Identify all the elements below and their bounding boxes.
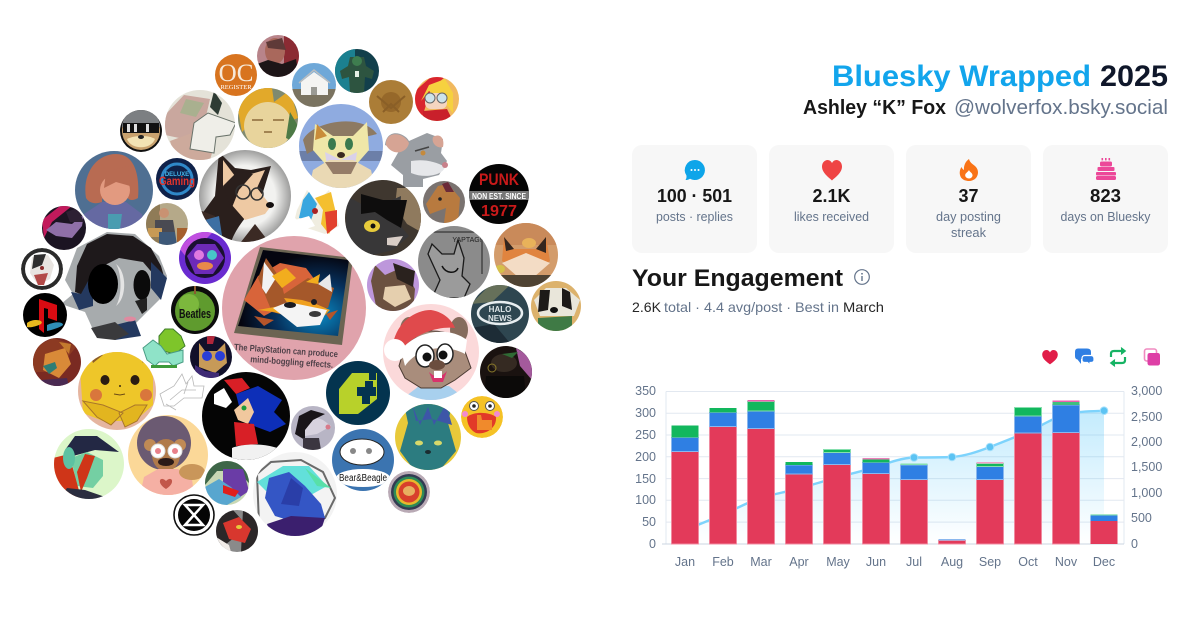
avatar: Santa Sonic	[202, 372, 290, 460]
month labels: Dec	[1093, 555, 1115, 569]
panel: posting streak stat: day posting	[936, 210, 1001, 224]
icon: legend heart	[1042, 350, 1058, 364]
panel: days on Bluesky stat	[1043, 145, 1168, 253]
avatar: cat with blue glasses	[190, 336, 232, 378]
avatar: punk poster: PUNK	[479, 170, 520, 189]
avatar: gray comic sketch: YAPTAG!	[452, 237, 482, 244]
icon: chat bubble	[685, 160, 705, 180]
profile name and handle	[803, 97, 1168, 119]
left axis labels: 0	[649, 537, 656, 551]
left axis labels: 350	[635, 384, 656, 398]
left axis labels: 150	[635, 472, 656, 486]
engagement summary text: total · 4.4 avg/post · Best in	[664, 299, 839, 315]
icon: heart	[822, 160, 842, 180]
icon: birthday cake	[1096, 158, 1116, 180]
right axis labels: 2,000	[1131, 435, 1162, 449]
left axis labels	[635, 384, 656, 551]
avatar: dark armored man	[257, 35, 300, 77]
profile name and handle: Ashley “K” Fox	[803, 97, 946, 119]
avatar: Beatles green apple	[171, 286, 219, 334]
avatar: brown horse	[423, 181, 465, 223]
avatar: dark figure with green glasses	[480, 346, 532, 398]
avatar: lion	[33, 338, 81, 386]
panel: days on Bluesky stat: days on Bluesky	[1060, 210, 1151, 224]
avatar: punk poster	[469, 164, 529, 224]
month labels: Nov	[1055, 555, 1078, 569]
chart grid	[662, 392, 1124, 544]
avatar: punk poster: 1977	[481, 203, 517, 220]
panel: likes received stat: likes received	[794, 210, 869, 224]
left axis labels: 100	[635, 493, 656, 507]
month labels: Feb	[712, 555, 734, 569]
avatar: badger	[531, 281, 581, 331]
avatar: red-haired person	[75, 151, 153, 229]
right axis labels: 1,500	[1131, 460, 1162, 474]
Oct bar	[1014, 408, 1042, 544]
avatar: gray comic sketch	[418, 226, 490, 298]
avatar: PlayStation magazine fox: The PlayStation can produce	[234, 342, 338, 359]
right axis labels: 3,000	[1131, 384, 1162, 398]
month labels: Mar	[750, 555, 772, 569]
panel: days on Bluesky stat: 823	[1090, 186, 1121, 206]
panel: avatar bubble cluster	[21, 35, 581, 552]
avatar: Halo news: NEWS	[488, 314, 513, 323]
avatar: sleeping red fox	[494, 223, 558, 287]
avatar: bear with heart glasses	[128, 415, 208, 495]
Jul bar	[900, 464, 928, 544]
avatar: colorful fox	[295, 190, 339, 234]
avatar: PlayStation logo	[23, 293, 67, 337]
avatar: blonde sleeping face	[238, 88, 298, 150]
avatar: purple neon creature	[179, 232, 231, 284]
avatar: line sketch dragon	[160, 374, 204, 410]
heading: Bluesky Wrapped 2025: Bluesky Wrapped	[832, 60, 1091, 93]
Jan bar	[672, 426, 698, 544]
left axis labels: 50	[642, 515, 656, 529]
month labels: Aug	[941, 555, 963, 569]
Sep bar	[976, 462, 1004, 544]
avatar: OC Register logo	[215, 54, 257, 96]
avatar: green armored soldier	[335, 49, 379, 93]
avatar: Bear and Beagle: Bear&Beagle	[339, 473, 387, 484]
month labels: Sep	[979, 555, 1001, 569]
chart legend icons	[1042, 348, 1160, 366]
Nov bar	[1052, 400, 1080, 544]
Mar bar	[748, 400, 774, 544]
icon: info	[855, 270, 869, 284]
avatar: dark teal logo with plus	[326, 361, 390, 425]
icon: legend quotes	[1144, 349, 1160, 366]
month labels: Apr	[789, 555, 809, 569]
avatar: teal creature on yellow	[395, 404, 461, 470]
avatar: blonde red-hood character	[415, 77, 459, 121]
avatar: gray wolf with black hair	[61, 232, 167, 340]
May bar	[824, 450, 850, 544]
avatar: punk poster: NON EST. SINCE	[472, 192, 527, 201]
avatar: dark wolf with yellow eye	[345, 180, 421, 256]
avatar: Beatles green apple: Beatles	[179, 306, 211, 321]
month labels: Jan	[675, 555, 695, 569]
avatar: Halo news	[471, 285, 529, 343]
left axis labels: 250	[635, 428, 656, 442]
avatar: blue dragon	[253, 452, 337, 536]
avatar: man with guitar	[146, 203, 188, 245]
avatar: blue cat	[205, 461, 249, 505]
right axis labels: 2,500	[1131, 410, 1162, 424]
engagement summary text	[632, 299, 884, 315]
avatar: possum in black ring	[21, 248, 63, 290]
avatar: black-haired mouse	[291, 406, 335, 450]
avatar: rainbow rings	[388, 471, 430, 513]
avatar: brown texture	[369, 80, 413, 124]
avatar: PlayStation magazine fox: mind-boggling effects.	[250, 354, 333, 370]
avatar: gray rat	[385, 133, 448, 187]
avatar: Halo news: HALO	[489, 305, 511, 314]
avatar: gaming logo	[156, 158, 198, 200]
Jun bar	[862, 458, 890, 544]
right axis labels	[1131, 384, 1162, 551]
panel: posting streak stat: streak	[951, 226, 987, 240]
avatar: sketch animal	[165, 90, 236, 160]
avatar: gaming logo: Gaming	[159, 174, 195, 188]
icon: flame	[960, 159, 978, 181]
icon: legend reposts	[1110, 348, 1126, 366]
avatar: green-skin girl with cap	[53, 429, 124, 499]
Aug bar	[938, 539, 966, 544]
avatar: white church	[292, 63, 336, 107]
heading: Bluesky Wrapped 2025: 2025	[1100, 60, 1168, 93]
panel: posts and replies stat	[632, 145, 757, 253]
icon: legend replies	[1075, 348, 1094, 365]
avatar: PlayStation magazine fox	[222, 236, 366, 380]
left axis labels: 200	[635, 450, 656, 464]
month labels: Jun	[866, 555, 886, 569]
month labels: May	[826, 555, 851, 569]
Apr bar	[786, 462, 812, 544]
avatar: red demon	[216, 510, 258, 552]
avatar: Pikachu	[78, 352, 156, 430]
avatar: fox with hat	[299, 104, 383, 188]
month labels: Jul	[906, 555, 922, 569]
avatar: thumbs-up emoji	[461, 396, 503, 438]
panel: posting streak stat	[906, 145, 1031, 253]
month labels	[675, 555, 1115, 569]
panel: likes received stat: 2.1K	[812, 186, 850, 206]
avatar: Bear and Beagle	[332, 429, 394, 491]
profile name and handle: @wolverfox.bsky.social	[954, 97, 1168, 119]
avatar: brown wolf on purple	[367, 259, 419, 311]
stacked bars: likes, replies, reposts, quotes	[672, 400, 1118, 544]
panel: likes received stat	[769, 145, 894, 253]
engagement summary text: 2.6K	[632, 299, 662, 315]
engagement summary text: March	[843, 299, 884, 315]
avatar: Extinction Rebellion symbol	[173, 494, 215, 536]
month labels: Oct	[1018, 555, 1038, 569]
Feb bar	[710, 408, 736, 544]
avatar: gaming logo: DELUXE	[165, 172, 189, 178]
right axis labels: 0	[1131, 537, 1138, 551]
panel: posting streak stat: 37	[958, 186, 978, 206]
avatar: maroon purple creature	[42, 206, 86, 250]
Dec bar	[1090, 514, 1118, 544]
avatar: OC Register logo: OC	[219, 60, 253, 87]
avatar: wolf with glasses	[199, 150, 291, 242]
cumulative area and line	[685, 407, 1108, 544]
panel: posts and replies stat: posts · replies	[656, 210, 733, 224]
panel: posts and replies stat: 100 · 501	[657, 186, 732, 206]
avatar: OC Register logo: REGISTER	[220, 84, 252, 91]
heading: Your Engagement: Your Engagement	[632, 265, 843, 292]
avatar: Bulbasaur	[143, 329, 185, 368]
avatar: bear with sunglasses	[120, 108, 162, 152]
right axis labels: 1,000	[1131, 486, 1162, 500]
engagement chart	[635, 384, 1162, 569]
right axis labels: 500	[1131, 511, 1152, 525]
left axis labels: 300	[635, 406, 656, 420]
avatar: beaver in Santa hat	[383, 304, 479, 400]
